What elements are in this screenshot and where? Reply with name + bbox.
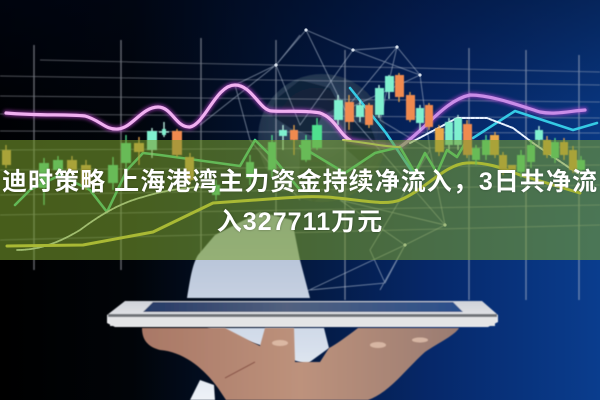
tablet edge bbox=[108, 314, 497, 317]
candlesticks bbox=[2, 73, 585, 205]
orange candles bbox=[2, 73, 577, 190]
tablet screen bbox=[143, 302, 463, 312]
tablet bbox=[107, 301, 498, 327]
grid lines bbox=[0, 38, 600, 300]
title bbox=[2, 168, 598, 236]
pink trend line bbox=[6, 85, 585, 147]
network nodes bbox=[274, 28, 447, 247]
globe bbox=[258, 74, 386, 202]
title: 入327711万元 bbox=[217, 208, 383, 236]
network lines bbox=[200, 30, 445, 292]
teal candles bbox=[147, 75, 543, 158]
finger highlights bbox=[272, 338, 428, 348]
green candles bbox=[39, 118, 585, 205]
shirt sleeve bbox=[187, 212, 329, 400]
title: 迪时策略 上海港湾主力资金持续净流入，3日共净流 bbox=[2, 168, 598, 196]
hand bbox=[142, 328, 459, 400]
green, cyan, white and yellow trend lines bbox=[7, 88, 597, 250]
translucent olive band bbox=[0, 140, 600, 260]
